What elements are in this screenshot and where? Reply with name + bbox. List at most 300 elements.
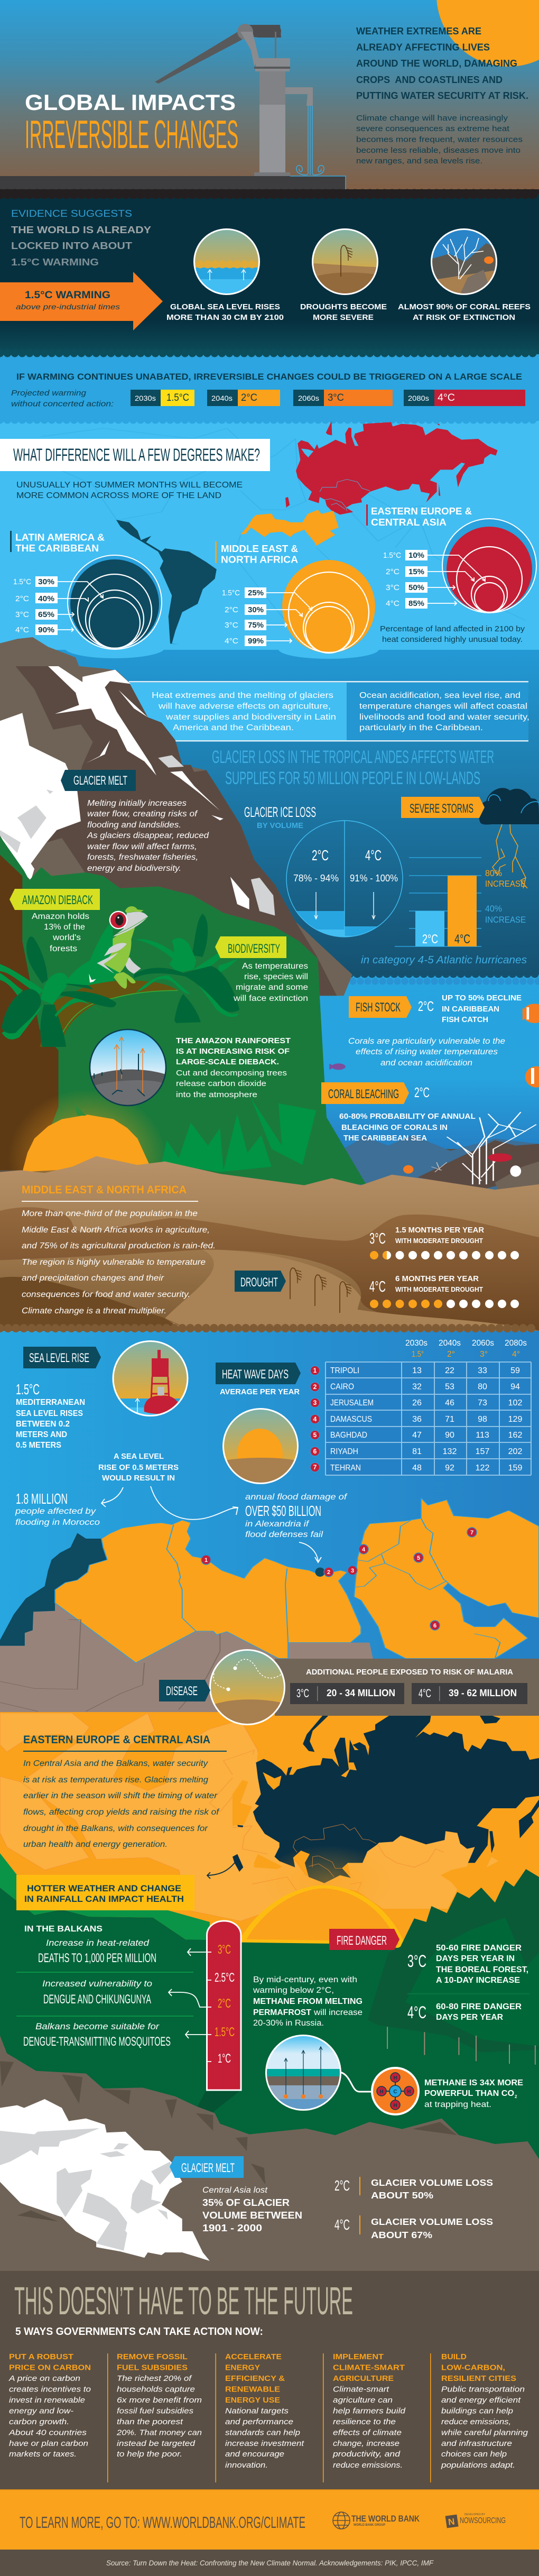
column: climate-smart agriculture: help farmers build [333, 2407, 406, 2415]
table: heat wave days by city: 2 [313, 1383, 317, 1391]
thermometer: 3°C [218, 1943, 231, 1957]
boreal forest [368, 1869, 539, 2065]
chart: glacier ice loss: 78% - 94% [293, 873, 339, 884]
heading: EASTERN EUROPE & CENTRAL ASIA [23, 1734, 210, 1746]
column: carbon price: A price on carbon [8, 2375, 80, 2383]
grass [74, 1098, 316, 1172]
label: biodiversity [215, 936, 286, 958]
text: amazon rainforest dieback: into the atmosphere [176, 1090, 257, 1099]
column: climate-smart agriculture: IMPLEMENT [333, 2353, 384, 2361]
text: Central Asia lost: Central Asia lost [202, 2186, 268, 2195]
stat: 3C malaria: 20 - 34 MILLION [327, 1688, 395, 1698]
label: heat wave days [216, 1363, 301, 1396]
text: Mediterranean sea level: MEDITERRANEAN [16, 1398, 85, 1407]
icon: coral reef circle [431, 228, 499, 295]
table: heat wave days by city: 132 [443, 1447, 457, 1456]
text: sea level rise result: WOULD RESULT IN [102, 1474, 175, 1483]
text block: melting: Melting initially increases [87, 799, 187, 808]
stat: 4C glacier volume [334, 2215, 493, 2240]
text: methane power: 2 [515, 2094, 517, 2099]
bubble labels [383, 550, 485, 609]
icon: permafrost circle [266, 2035, 373, 2111]
map pins: 3 [351, 1568, 354, 1574]
illustration: rainforest [0, 836, 366, 1185]
table: heat wave days by city: 90 [445, 1431, 454, 1440]
chart: Latin America bubble [10, 531, 162, 649]
stat: 4C drought: 4°C [369, 1278, 386, 1295]
icon: fish [329, 1004, 539, 1174]
stat: 4C glacier volume: 4°C [334, 2216, 350, 2233]
label: amazon dieback [10, 889, 100, 910]
chart: Eastern Europe bubble [366, 504, 536, 644]
table: heat wave days by city: 4° [512, 1350, 520, 1359]
column: fossil fuel subsidies: REMOVE FOSSIL [117, 2353, 188, 2361]
heading box: WHAT DIFFERENCE WILL A FEW DEGREES MAKE? [13, 445, 260, 464]
sun glow [8, 1089, 166, 1227]
panel: this doesn't have to be the future [0, 2271, 539, 2490]
text: amazon holds: 13% of the [44, 923, 85, 932]
column: carbon price: energy and low- [9, 2407, 73, 2415]
text: corals vulnerable [348, 1037, 505, 1068]
table: heat wave days by city: 92 [445, 1464, 454, 1473]
caption: coral: AT RISK OF EXTINCTION [413, 314, 515, 322]
text: amazon rainforest dieback: release carbon dioxide [176, 1079, 266, 1088]
thermometer: 1°C [218, 2051, 231, 2066]
bar: 2060s [293, 390, 393, 406]
text block: melting: energy and biodiversity. [87, 864, 181, 873]
stat: 4C glacier volume: GLACIER VOLUME LOSS [371, 2216, 493, 2227]
panel: Middle East and North Africa desert [0, 1156, 539, 1331]
text block: melting: forests, freshwater fisheries, [87, 853, 198, 862]
column: energy efficiency [225, 2353, 304, 2470]
branch and leaves [0, 914, 239, 1047]
logo: NowSourcing: DEVELOPED BY [464, 2513, 485, 2516]
text: Alexandria flood damage: OVER $50 BILLION [245, 1503, 321, 1519]
text: amazon rainforest dieback: Cut and decomposing trees [176, 1069, 287, 1078]
column: low-carbon cities: choices can help [441, 2450, 507, 2459]
column: energy efficiency: increase investment [225, 2440, 304, 2448]
panel: projected warming timeline [0, 353, 539, 423]
text: permafrost: PERMAFROST [253, 2008, 312, 2017]
text: temperatures rise [233, 962, 308, 1003]
bubble labels: 2°C [386, 567, 399, 576]
bubble labels: 3°C [386, 583, 399, 592]
chart: storm bars [361, 858, 527, 966]
column: low-carbon cities: and infrastructure [441, 2440, 512, 2448]
heading: glacier loss [212, 747, 494, 788]
column: fossil fuel subsidies [116, 2353, 202, 2459]
arrow: 1.5C warming: above pre-industrial times [16, 302, 120, 311]
logo: World Bank: THE WORLD BANK [351, 2514, 420, 2524]
bar: 2040s: 2040s [211, 394, 233, 402]
text block: intro paragraph: severe consequences as extreme heat [356, 124, 510, 133]
text: temperatures rise: rise, species will [244, 972, 308, 981]
stat: fire 3C: THE BOREAL FOREST, [436, 1965, 528, 1974]
column: carbon price: PRICE ON CARBON [9, 2363, 91, 2372]
text block: ocean acidification [359, 691, 529, 732]
panel: Eastern Europe and Central Asia [0, 1712, 539, 2164]
chart: glacier ice loss [244, 804, 404, 938]
stat: fire 4C [407, 1993, 529, 2022]
table: heat wave days by city: 73 [478, 1399, 487, 1407]
text: methane power: POWERFUL THAN CO [424, 2089, 514, 2098]
title: GLOBAL IMPACTS [25, 90, 236, 115]
bar: 2080s: 4°C [438, 392, 455, 403]
bubble labels: 3°C [15, 610, 29, 619]
stat: fire 4C: 60-80 FIRE DANGER [436, 2002, 522, 2011]
label: projected warming: without concerted action: [11, 400, 114, 408]
text: Alexandria flood damage [245, 1493, 348, 1539]
text block: is at risk as temperatures rise. Glaciers melting [23, 1775, 208, 1784]
bubble labels: 99% [248, 637, 264, 646]
icon: drought circle [312, 228, 380, 296]
icon: sea level rise circle [193, 228, 262, 295]
text block: MENA: Climate change is a threat multiplier. [22, 1307, 166, 1315]
table: heat wave days by city: 33 [478, 1366, 487, 1375]
table: heat wave days by city: 3 [313, 1399, 317, 1406]
heading: IF WARMING CONTINUES UNABATED, IRREVERSIBLE CHANGES COULD BE TRIGGERED ON A LARGE SCALE [16, 372, 522, 382]
table: heat wave days by city: BAGHDAD [330, 1431, 367, 1440]
text: permafrost: By mid-century, even with [253, 1975, 357, 1984]
label: glacier melt: GLACIER MELT [73, 774, 127, 788]
logo: NowSourcing: NOWSOURCING [460, 2516, 506, 2525]
column: fossil fuel subsidies: to help the poor. [117, 2450, 182, 2459]
icon: tree frog [65, 906, 148, 989]
column: low-carbon cities: and energy efficient [441, 2396, 521, 2405]
text block: intro paragraph: becomes more frequent, water resources [356, 135, 523, 144]
column: energy efficiency: National targets [225, 2407, 289, 2415]
table: heat wave days by city: 113 [476, 1431, 489, 1440]
map pins [201, 1528, 477, 1630]
text: Mediterranean sea level: SEA LEVEL RISES [16, 1409, 83, 1418]
map: North Africa and Middle East [0, 1498, 539, 1712]
table: heat wave days by city: 162 [508, 1431, 522, 1440]
text: fish decline: IN CARIBBEAN [442, 1005, 499, 1014]
text block: heat extremes [152, 691, 336, 732]
table: heat wave days by city: 59 [510, 1366, 520, 1375]
stat: fire 3C: 3°C [407, 1952, 426, 1971]
column: carbon price: have or plan carbon [9, 2440, 88, 2448]
column: energy efficiency: ACCELERATE [225, 2353, 282, 2361]
text: fish decline: FISH CATCH [442, 1016, 488, 1024]
heading: ADDITIONAL PEOPLE EXPOSED TO RISK OF MALARIA [306, 1668, 513, 1677]
text: in the Balkans: IN THE BALKANS [24, 1925, 103, 1934]
bar: 2080s [404, 390, 525, 406]
text: Alexandria flood damage: flood defenses fail [245, 1530, 323, 1539]
text: permafrost: will increase [313, 2008, 363, 2017]
sun [22, 1115, 150, 1172]
panel: Latin America intro boxes [129, 681, 528, 741]
text block: intro statement: CROPS AND COASTLINES AND [356, 75, 503, 85]
logo: World Bank: WORLD BANK GROUP [354, 2523, 386, 2527]
table: heat wave days by city: 32 [412, 1382, 422, 1392]
map: Russia and Central Asia [233, 1716, 539, 1883]
bubble labels: 1.5°C [222, 588, 240, 597]
icon: water stream [290, 106, 346, 189]
panel: learn more footer band [0, 2489, 539, 2550]
text: amazon rainforest dieback: THE AMAZON RAINFOREST [176, 1036, 291, 1045]
icon: water pump [155, 24, 313, 176]
icon: sun [436, 0, 539, 67]
heading: EASTERN EUROPE & [371, 505, 472, 517]
table: heat wave days by city: TEHRAN [330, 1464, 361, 1473]
text: temperatures rise: migrate and some [236, 983, 308, 992]
label: heat wave days: AVERAGE PER YEAR [220, 1387, 300, 1396]
stat: 4C malaria: 4°C [419, 1687, 431, 1700]
text block: intro paragraph: new ranges, and sea levels rise. [356, 157, 482, 165]
column: energy efficiency: and performance [225, 2418, 293, 2426]
text: Morocco flooding: 1.8 MILLION [16, 1491, 68, 1507]
column: energy efficiency: EFFICIENCY & [225, 2375, 285, 2383]
text: Alexandria flood damage: annual flood damage of [245, 1493, 348, 1502]
text: amazon rainforest dieback: LARGE-SCALE DIEBACK. [176, 1057, 279, 1066]
stat: 3C drought: 3°C [369, 1230, 386, 1247]
icon: methane molecule: H [407, 2089, 411, 2095]
table: heat wave days by city: 22 [445, 1366, 454, 1375]
column: climate-smart agriculture: productivity, and [332, 2450, 401, 2459]
text block: hot summer months: MORE COMMON ACROSS MORE OF THE LAND [16, 491, 221, 500]
stat: fire 3C: DAYS PER YEAR IN [436, 1954, 515, 1963]
stat: 3C drought [369, 1226, 519, 1259]
text: permafrost: 20-30% in Russia. [253, 2019, 324, 2028]
text block: melting: As glaciers disappear, reduced [87, 831, 209, 840]
text: fish decline: 2°C [418, 998, 434, 1014]
table: heat wave days by city: 2060s [472, 1339, 494, 1348]
table: heat wave days by city: 81 [412, 1447, 422, 1456]
table: heat wave days by city: 1 [313, 1367, 317, 1374]
title [25, 90, 238, 157]
map: latin america [116, 520, 217, 645]
table: heat wave days by city: 13 [412, 1366, 422, 1375]
map pins: 7 [470, 1530, 473, 1536]
text block: MENA: More than one-third of the population in the [22, 1209, 198, 1218]
icon: storm cloud [478, 788, 539, 888]
panel: what difference will a few degrees make [0, 420, 539, 650]
table: heat wave days by city: 46 [445, 1399, 454, 1407]
table: heat wave days by city: 2030s [405, 1339, 428, 1348]
text: Mediterranean sea level: 1.5°C [16, 1381, 40, 1397]
text: Mediterranean sea level: 0.5 METERS [16, 1441, 61, 1450]
bubble labels: 3°C [225, 621, 238, 630]
bubble labels: 2°C [225, 605, 238, 614]
text: amazon rainforest dieback [176, 1036, 291, 1099]
column: climate-smart agriculture: effects of climate [333, 2429, 402, 2437]
tree trunk [0, 855, 59, 1170]
icon: disease circle [210, 1650, 285, 1725]
text block: intro statement: WEATHER EXTREMES ARE [356, 26, 481, 36]
column: fossil fuel subsidies: fossil fuel subsidies [117, 2407, 193, 2415]
text block: melting: water flow, creating risks of [87, 809, 198, 818]
caption: sea level: GLOBAL SEA LEVEL RISES [170, 303, 280, 311]
bubble labels: 4°C [15, 625, 29, 634]
column: energy efficiency: ENERGY USE [225, 2396, 280, 2405]
column: fossil fuel subsidies: The richest 20% of [117, 2375, 192, 2383]
text block: melting: water flow will affect farms, [87, 842, 197, 851]
text: Mediterranean sea level: METERS AND [16, 1430, 67, 1439]
text: in the Balkans [16, 1925, 193, 2049]
label: coral bleaching: CORAL BLEACHING [328, 1087, 399, 1101]
column: energy efficiency: innovation. [225, 2461, 268, 2470]
icon: methane molecule [372, 2068, 419, 2114]
text block: intro statement: PUTTING WATER SECURITY AT RISK. [356, 90, 528, 101]
panel: evidence 1.5C [0, 189, 539, 354]
stat: 2C glacier volume: ABOUT 50% [371, 2190, 434, 2201]
text: amazon holds: Amazon holds [32, 912, 89, 921]
heading: THE CARIBBEAN [15, 542, 99, 554]
stat: 2C glacier volume [334, 2177, 493, 2201]
label: coral bleaching [321, 1082, 430, 1104]
text: Alexandria flood damage: in Alexandria if [245, 1520, 310, 1529]
caption: sea level: MORE THAN 30 CM BY 2100 [166, 314, 284, 322]
text block: MENA: consequences for food and water security. [22, 1290, 190, 1299]
stat: 3C drought: WITH MODERATE DROUGHT [395, 1237, 483, 1245]
text block: intro paragraph [356, 114, 523, 165]
column: low-carbon cities: LOW-CARBON, [441, 2363, 505, 2372]
text: in the Balkans: DENGUE AND CHIKUNGUNYA [43, 1992, 151, 2007]
bubble labels: 1.5°C [383, 551, 401, 560]
column: climate-smart agriculture: CLIMATE-SMART [333, 2363, 405, 2372]
column: climate-smart agriculture: AGRICULTURE [333, 2375, 394, 2383]
column: low-carbon cities: reduce emissions, [441, 2418, 511, 2426]
table: heat wave days by city: 102 [508, 1399, 522, 1407]
column: fossil fuel subsidies: 6x more benefit from [117, 2396, 202, 2405]
heading: MIDDLE EAST & NORTH AFRICA [22, 1184, 187, 1196]
stat: 4C malaria: 39 - 62 MILLION [449, 1688, 517, 1698]
column: carbon price: carbon growth. [9, 2418, 69, 2426]
table: heat wave days by city: 47 [412, 1431, 422, 1440]
heading: NORTH AFRICA [221, 554, 298, 565]
note: percentage of land: Percentage of land affected in 2100 by [380, 624, 525, 633]
text block: drought in the Balkans, with consequences for [23, 1824, 208, 1833]
text: corals vulnerable: Corals are particularly vulnerable to the [348, 1037, 505, 1046]
green hills [0, 1853, 539, 2164]
chart: storm bars: 4°C [454, 932, 470, 946]
panel: source line: Source: Turn Down the Heat: Confronting the New Climate Normal. Acknowledgements: PIK, IPCC, IMF [106, 2559, 434, 2567]
chart: Middle East bubble [215, 541, 375, 653]
panel: source line [0, 2550, 539, 2576]
column: energy efficiency: and encourage [225, 2450, 284, 2459]
table: heat wave days by city: CAIRO [330, 1382, 354, 1392]
label: sea level rise: SEA LEVEL RISE [29, 1351, 89, 1365]
text: methane power: METHANE IS 34X MORE [424, 2078, 523, 2087]
bar: 2030s [131, 390, 194, 406]
column: low-carbon cities: buildings can help [441, 2407, 513, 2415]
stat: fire 3C [407, 1944, 528, 1985]
ground slab [0, 176, 346, 189]
text block: MENA: and 75% of its agricultural production is rain-fed. [22, 1241, 216, 1250]
chart: storm bars: 80% [485, 868, 502, 878]
label: fire danger: FIRE DANGER [337, 1934, 387, 1948]
note: percentage of land [380, 624, 525, 644]
text block: MENA: Middle East & North Africa works in agriculture, [22, 1226, 210, 1235]
arrows: thermometer to effects [169, 1948, 207, 2038]
stat: fire 4C: DAYS PER YEAR [436, 2013, 503, 2022]
label: sea level rise [23, 1347, 101, 1368]
text: coral probability: THE CARIBBEAN SEA [343, 1134, 428, 1143]
panel: malaria additional exposure [159, 1650, 539, 1725]
icon: dieback circle [90, 1028, 166, 1108]
text block: flows, affecting crop yields and raising the risk of [23, 1808, 220, 1817]
text block: hot summer months: UNUSUALLY HOT SUMMER MONTHS WILL BECOME [16, 481, 243, 490]
text: in the Balkans: Increased vulnerability to [42, 1979, 152, 1989]
bar: 2030s: 2030s [135, 394, 156, 402]
text block: MENA: The region is highly vulnerable to temperature [22, 1258, 206, 1267]
text: in the Balkans: Increase in heat-related [46, 1938, 150, 1948]
map pins: 1 [205, 1557, 208, 1563]
text: temperatures rise: As temperatures [242, 962, 308, 971]
label: fish stock [349, 996, 412, 1018]
illustration: Andes mountain [0, 637, 352, 996]
table: heat wave days by city: 129 [508, 1415, 522, 1424]
text block: intro statement: AROUND THE WORLD, DAMAGING [356, 58, 517, 69]
text: permafrost: warming below 2°C, [253, 1986, 334, 1995]
table: heat wave days by city: 2080s [505, 1339, 527, 1348]
table: heat wave days by city: 36 [412, 1415, 422, 1424]
label: drought: DROUGHT [240, 1275, 278, 1290]
thermometer: 2.5°C [215, 1971, 235, 1985]
text: coral probability: 60-80% PROBABILITY OF ANNUAL [339, 1112, 476, 1121]
column: carbon price: invest in renewable [9, 2396, 85, 2405]
column: energy efficiency: RENEWABLE [225, 2386, 280, 2394]
bubble labels: 4°C [225, 637, 238, 646]
map pins: 2 [327, 1569, 330, 1576]
stat: fire 4C: 4°C [407, 2003, 426, 2022]
bubble labels: 90% [38, 625, 54, 634]
column: low-carbon cities [441, 2353, 528, 2470]
label: glacier melt: GLACIER MELT [181, 2161, 235, 2175]
heading [366, 504, 472, 528]
arrows: flood result [101, 1486, 321, 1562]
label: severe storms: SEVERE STORMS [410, 802, 473, 816]
bubble labels: 30% [38, 577, 54, 586]
table: heat wave days by city: TRIPOLI [330, 1366, 359, 1375]
heading: MIDDLE EAST & [221, 543, 298, 554]
stat: 3C malaria: 3°C [296, 1687, 309, 1700]
text: Central Asia lost: 1901 - 2000 [202, 2222, 262, 2233]
caption: coral [398, 303, 531, 322]
bar: 2060s: 2060s [298, 394, 319, 402]
label: heat wave days: HEAT WAVE DAYS [222, 1367, 289, 1382]
column: low-carbon cities: Public transportation [441, 2386, 525, 2394]
text: sea level rise result: A SEA LEVEL [114, 1452, 164, 1461]
heading: evidence suggests [11, 208, 151, 268]
text: coral probability: BLEACHING OF CORALS IN [341, 1124, 448, 1132]
table: heat wave days by city: 157 [476, 1447, 489, 1456]
map: middle east and north africa [240, 510, 339, 546]
caption: droughts: DROUGHTS BECOME [300, 303, 387, 311]
label: severe storms [401, 797, 485, 818]
map: eastern europe and central asia [285, 421, 498, 514]
column: fossil fuel subsidies: than the poorest [117, 2418, 183, 2426]
text block: hot summer months [16, 481, 243, 500]
heading [10, 531, 105, 554]
bubble labels: 25% [248, 588, 264, 597]
chart: storm bars: 2°C [422, 932, 438, 946]
heading [215, 541, 298, 565]
table: heat wave days by city: RIYADH [330, 1447, 358, 1456]
heading: evidence suggests: EVIDENCE SUGGESTS [11, 208, 132, 219]
chart: glacier ice loss: 91% - 100% [350, 873, 398, 884]
text block: ocean acidification: temperature changes will affect coastal [359, 702, 527, 711]
icon: methane molecule: H [379, 2089, 384, 2095]
bar: 2080s: 2080s [408, 394, 429, 402]
column: low-carbon cities: while careful planning [441, 2429, 528, 2437]
seabed [337, 1135, 539, 1191]
label: glacier melt [170, 2156, 244, 2178]
callout: hotter weather [16, 1875, 194, 1910]
table: heat wave days by city: 2° [447, 1350, 455, 1359]
text: Mediterranean sea level [16, 1381, 85, 1450]
